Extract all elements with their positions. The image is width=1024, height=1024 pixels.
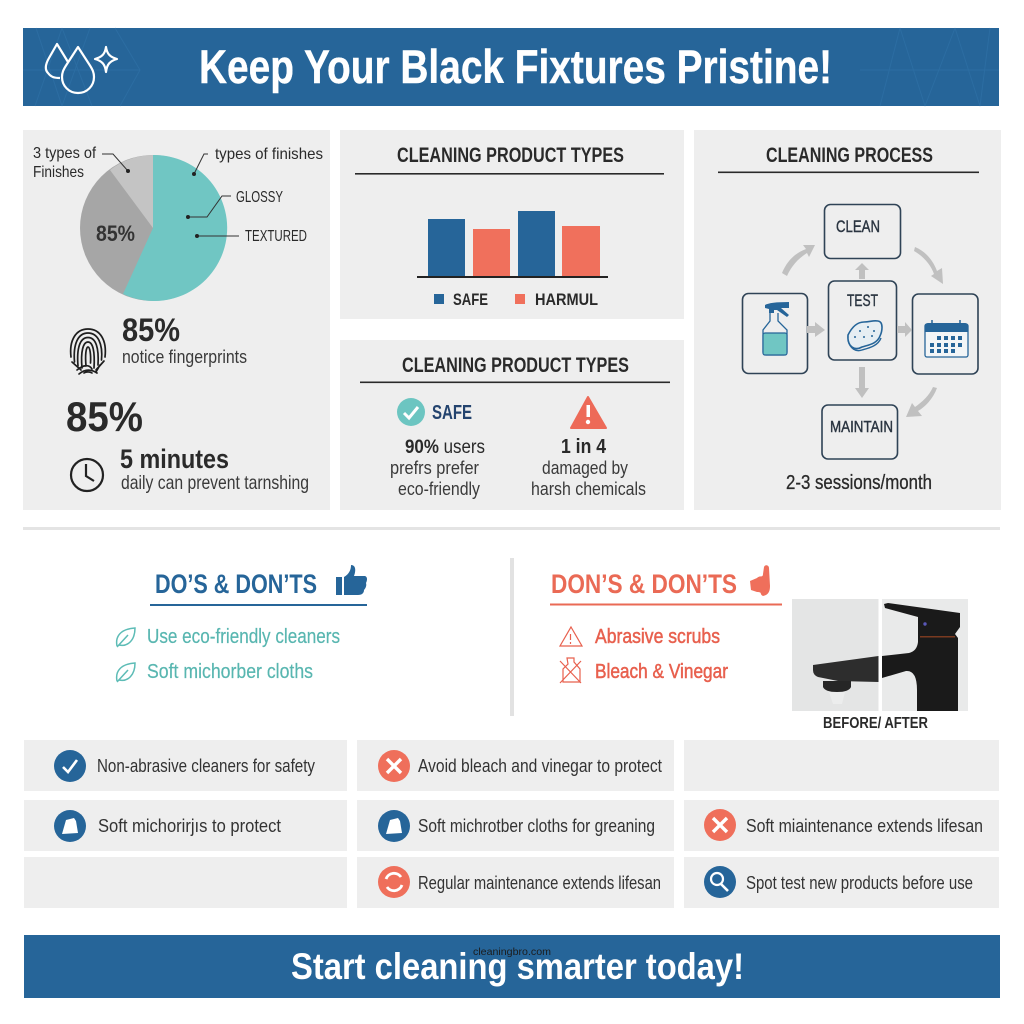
heading: DO’S & DON’TS xyxy=(155,569,317,599)
heading: CLEANING PROCESS xyxy=(766,144,933,167)
safe label: SAFE xyxy=(432,402,472,424)
harmful statistic: 1 in 4 xyxy=(561,436,607,458)
tip: maintenance x: Soft miaintenance extends lifesan xyxy=(746,815,983,836)
title: Keep Your Black Fixtures Pristine! xyxy=(199,40,832,93)
panel: cleaning product types bar chart xyxy=(340,130,684,319)
tip: spot test xyxy=(684,857,999,908)
heading: CLEANING PRODUCT TYPES xyxy=(397,144,624,167)
harmful statistic: damaged by xyxy=(542,457,629,478)
faucet after xyxy=(882,603,960,711)
step: spray bottle xyxy=(742,294,808,374)
stat: five minutes: daily can prevent tarnshing xyxy=(121,472,309,494)
icon: fingerprint xyxy=(71,329,105,374)
icon: leaf xyxy=(117,628,135,647)
item: bleach and vinegar: Bleach & Vinegar xyxy=(595,661,728,683)
harmful statistic: harsh chemicals xyxy=(531,478,646,499)
item: eco-friendly: Use eco-friendly cleaners xyxy=(147,626,340,648)
legend: SAFE xyxy=(453,290,488,309)
website: cleaningbro.com xyxy=(473,947,551,958)
step: clean xyxy=(824,204,900,258)
icon: pointing hand xyxy=(750,565,770,596)
step: test with sponge: TEST xyxy=(847,291,878,310)
tip: regular maintenance xyxy=(357,857,674,908)
empty tip panel xyxy=(684,740,999,791)
tip: spot test: Spot test new products before use xyxy=(746,872,973,893)
icon: crossed-out bottle xyxy=(560,658,581,683)
tip: non-abrasive cleaners: Non-abrasive cleaners for safety xyxy=(97,755,316,776)
safe statistic: prefrs prefer xyxy=(390,457,479,478)
stat: notice fingerprints: 85% xyxy=(122,312,180,348)
pie labels: TEXTURED xyxy=(245,228,307,245)
tip: soft cloths cleaning: Soft michrotber cloths for greaning xyxy=(418,815,655,836)
tip: non-abrasive cleaners xyxy=(24,740,347,791)
pie labels: Finishes xyxy=(33,164,84,181)
before and after caption: BEFORE/ AFTER xyxy=(823,715,928,732)
header banner xyxy=(23,28,999,106)
before and after photo xyxy=(792,599,968,732)
heading: CLEANING PRODUCT TYPES xyxy=(402,354,629,377)
stat: notice fingerprints: notice fingerprints xyxy=(122,346,247,367)
legend xyxy=(434,290,598,309)
bar chart xyxy=(417,211,608,278)
item: abrasive scrubs: Abrasive scrubs xyxy=(595,626,720,648)
empty tip panel xyxy=(24,857,347,908)
step: maintain: MAINTAIN xyxy=(830,419,893,436)
panel: do's xyxy=(117,565,367,683)
icon: thumbs up xyxy=(336,565,367,595)
panel: cleaning process xyxy=(694,130,1001,510)
stat: notice fingerprints xyxy=(122,312,247,367)
tip: regular maintenance: Regular maintenance extends lifesan xyxy=(418,872,661,893)
stat: five minutes: 5 minutes xyxy=(120,444,229,474)
step: test with sponge xyxy=(828,281,896,360)
icon: warning triangle xyxy=(571,397,606,428)
pie chart xyxy=(80,154,239,301)
step: clean: CLEAN xyxy=(836,217,880,236)
tip: maintenance x xyxy=(684,800,999,851)
tip: avoid bleach: Avoid bleach and vinegar to protect xyxy=(418,755,662,776)
call to action: Start cleaning smarter today! xyxy=(291,946,744,987)
icon: clock xyxy=(71,459,103,491)
step: calendar xyxy=(912,294,978,374)
step: maintain xyxy=(822,405,898,459)
panel: finishes and statistics xyxy=(23,130,330,510)
stat: large percentage: 85% xyxy=(66,393,143,440)
icon: leaf xyxy=(117,663,135,682)
process arrows xyxy=(782,245,943,417)
icon: water drops and sparkle xyxy=(46,44,117,93)
item: microfiber: Soft michorber cloths xyxy=(147,661,313,683)
tip: soft cloths protect xyxy=(24,800,347,851)
tip: soft cloths cleaning xyxy=(357,800,674,851)
safe statistic: eco-friendly xyxy=(398,478,481,499)
icon: safe check xyxy=(397,398,425,426)
panel: don'ts xyxy=(550,565,782,683)
icon: warning outline xyxy=(560,627,582,646)
tip: avoid bleach xyxy=(357,740,674,791)
harmful statistic xyxy=(531,436,646,499)
pie labels xyxy=(33,145,323,245)
stat: five minutes xyxy=(120,444,309,494)
pie labels: 3 types of xyxy=(33,145,97,162)
legend: HARMUL xyxy=(535,290,598,309)
safe statistic: 90% users xyxy=(405,437,485,458)
faucet before xyxy=(813,656,878,682)
pie chart: 85% xyxy=(96,221,135,246)
tip: soft cloths protect: Soft michorirjıs to protect xyxy=(98,815,281,836)
pie labels: types of finishes xyxy=(215,146,323,163)
panel: cleaning product types statistics xyxy=(340,340,684,510)
footer banner xyxy=(24,935,1000,998)
safe statistic xyxy=(390,437,485,499)
pie labels: GLOSSY xyxy=(236,189,283,206)
heading: DON’S & DON’TS xyxy=(551,569,737,599)
sessions caption: 2-3 sessions/month xyxy=(786,472,932,494)
